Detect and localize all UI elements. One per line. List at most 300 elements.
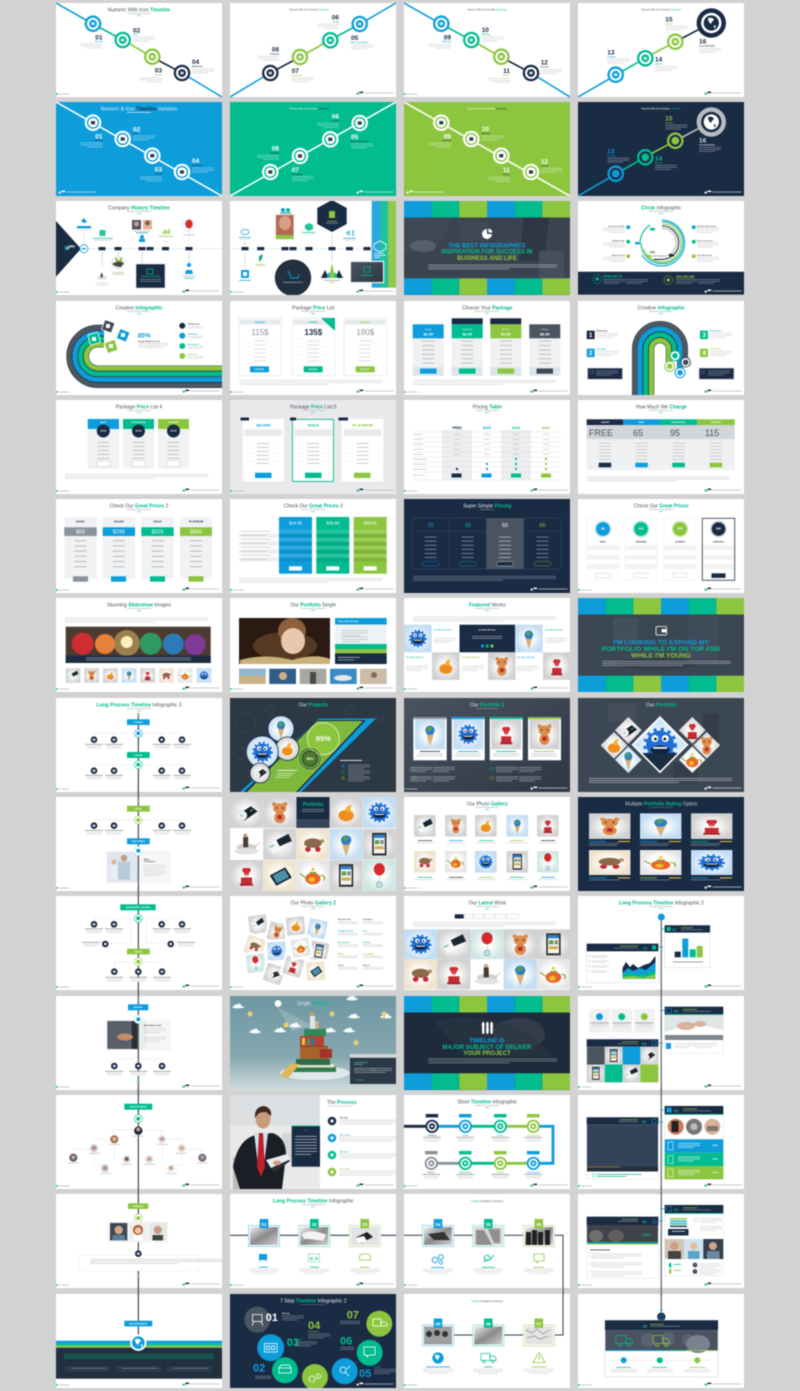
percentage rings: [300, 723, 339, 769]
step labels: Delivery: [503, 174, 510, 176]
slide: numeric timeline 01-04: [55, 2, 223, 98]
mosaic images: [230, 797, 396, 891]
step labels: [607, 116, 721, 170]
featured work grid: Your Work Title Here: [545, 628, 563, 632]
percentage block: 85%: [138, 333, 151, 340]
price card: business: REGISTER: [361, 369, 370, 371]
step numbers: 01: [266, 1312, 278, 1324]
step captions: Development: [308, 1330, 320, 1333]
process tree: DESIGN: [135, 808, 142, 810]
silver card: [240, 418, 284, 481]
pricing columns: FREE: [589, 428, 613, 438]
diagonal timeline with nodes: [404, 102, 570, 196]
headline: PORTFOLIO WHILE I'M ON TOP AND: [602, 646, 720, 653]
price card: personal: PERSONAL: [255, 321, 266, 324]
slide: long process timeline infographic: [230, 1194, 396, 1288]
numbered steps: 4: [702, 350, 706, 357]
numbered steps: [587, 330, 732, 357]
legend list: Brainstorm: [188, 353, 198, 356]
numbered steps: 3: [702, 332, 706, 339]
left list: Professional Slides: [608, 226, 625, 228]
pricing columns: $35.99: [326, 520, 340, 525]
slide: package price list 4: [55, 400, 222, 494]
title: Our Portfolio Single: [291, 603, 336, 609]
video card: [587, 1117, 658, 1179]
process tree: PLANNING: [134, 721, 144, 724]
about block with photo: [106, 847, 171, 883]
title: 7 Step Timeline Infographic 2: [280, 1299, 347, 1305]
area chart card: [587, 944, 658, 983]
title: Timeline Infographic Continued: [471, 1200, 504, 1203]
step labels: Timeline: [155, 74, 162, 76]
left list: Unlimited Style: [612, 240, 625, 242]
title: Long Process Timeline Infographic: [273, 1199, 354, 1205]
pricing grid: [412, 518, 561, 569]
small diamond images: [601, 717, 720, 773]
step labels: Multitasking: [192, 65, 202, 68]
diagonal timeline with nodes: [56, 102, 222, 196]
category lists: Mobiles: [338, 953, 345, 955]
step labels: 13: [607, 149, 615, 156]
left list: [603, 226, 630, 262]
thumbnail row: [239, 669, 387, 684]
bottom row nodes: [422, 1151, 542, 1178]
plan cards: Business: [502, 329, 510, 331]
step 07: 07: [536, 1321, 542, 1326]
plan cards: DIAMONDS: [713, 540, 725, 543]
timeline line: [422, 1294, 563, 1335]
title: Our Projects: [299, 703, 328, 709]
price card: business: [344, 318, 387, 376]
businessman photo: [230, 1095, 320, 1189]
plan columns: $65: [76, 529, 85, 535]
plan columns: $325: [152, 529, 164, 535]
slide: our photo gallery 2: [229, 896, 396, 990]
plan cards: $365: [716, 529, 722, 531]
step labels: [80, 27, 214, 82]
title: Stunning Slideshow Images: [107, 603, 171, 609]
colour bands: [404, 996, 570, 1012]
process tree: CONTENT: [134, 755, 144, 757]
step labels: 05: [351, 35, 359, 42]
timeline spine: [658, 914, 665, 990]
slide: process timeline with about block: [55, 796, 222, 892]
price cards: $25.99: [100, 430, 106, 432]
title: Our Photo Gallery: [467, 802, 508, 808]
triangle mini chart: [321, 251, 343, 283]
description panel: [335, 618, 387, 664]
title: Numeric With Icon Timeline Continued: [289, 9, 329, 12]
headline: [602, 640, 720, 659]
step labels: Basic Layout Master: [351, 140, 369, 143]
timeline items above and below: [77, 218, 196, 288]
step labels: Interview: [541, 65, 549, 68]
step 04: 04: [436, 1222, 441, 1227]
process tree: DEVELOPMENT: [131, 841, 146, 843]
three feature tiles: [589, 1009, 655, 1039]
clouds and balloons: [232, 996, 392, 1047]
plan cards: $2.99: [462, 332, 472, 336]
title: Single Project: [297, 1001, 329, 1007]
step labels: 07: [292, 68, 299, 75]
step labels: 15: [665, 116, 673, 123]
price card: business: BUSINESS: [360, 322, 371, 324]
name labels: [68, 1136, 208, 1174]
arch colour track: [634, 324, 686, 395]
price card: company: REGISTER: [309, 369, 318, 371]
notes: [410, 767, 541, 781]
numbered steps: 1: [589, 332, 593, 339]
diagonal green panel: [240, 718, 376, 792]
comparison table: [413, 426, 561, 480]
slide: numeric timeline 05-08: [229, 2, 397, 98]
delivery card: [605, 1320, 718, 1377]
step labels: Satisfied: [655, 62, 662, 65]
process tree: DELIVERY: [134, 1007, 143, 1009]
pricing columns: [279, 517, 387, 574]
step labels: 16: [699, 39, 707, 46]
price cards: BUSINESS: [169, 422, 179, 424]
thumbnail row: [66, 668, 211, 683]
step 01: [248, 1219, 280, 1274]
slide: diamond portfolio: [577, 697, 745, 793]
title: Featured Works: [469, 603, 506, 609]
pricing columns: PROFESSIONAL: [672, 421, 687, 424]
featured work grid: Your Work Title Here: [478, 628, 496, 632]
handshake card: [106, 1015, 171, 1051]
three detail nodes: [105, 1063, 171, 1076]
main photo of child reading: [239, 618, 330, 664]
price card: company: 135$: [304, 328, 323, 337]
pricing columns: 115: [705, 428, 719, 438]
step 03: 03: [362, 1222, 368, 1227]
legend list: Backup story: [188, 323, 199, 326]
step 05: [473, 1219, 504, 1274]
slide: feedback team photos: [56, 1194, 229, 1288]
slide: company history timeline: [55, 200, 222, 296]
filter tabs: [455, 914, 519, 918]
photo background shapes: [608, 703, 719, 783]
bottom row nodes: Delivery: [428, 1172, 435, 1174]
numbered steps: 2: [589, 350, 593, 357]
numbered steps: Positioning: [596, 348, 606, 350]
category lists: Brochure: [363, 942, 371, 944]
price card: company: COMPANY: [308, 321, 318, 324]
scattered photos: [241, 912, 332, 988]
about block with photo: Development: [144, 860, 156, 863]
slide: portfolio mosaic: [230, 796, 396, 892]
process tree: [85, 797, 191, 891]
step labels: [429, 27, 563, 83]
slide: package price list 5: [229, 400, 396, 494]
book tower illustration: [280, 1012, 350, 1080]
step labels: Draft: [133, 132, 138, 135]
slide: package price list: [229, 300, 396, 396]
right list: Beautiful Slide Design: [697, 225, 716, 228]
platinum card: [338, 418, 383, 481]
percentage rings: 85%: [316, 734, 331, 743]
delivery card: 09: [643, 1323, 648, 1328]
tilted icon tiles: [88, 320, 130, 354]
step labels: [607, 17, 721, 71]
slide: creative infographic arch: [578, 300, 744, 396]
step labels: 04: [192, 158, 200, 165]
step numbers: 06: [340, 1335, 352, 1347]
step labels: Marketing: [482, 132, 490, 135]
step 02: 02: [312, 1222, 317, 1227]
headline: WHILE I'M YOUNG: [631, 652, 691, 659]
top row nodes: Design: [497, 1135, 503, 1137]
step labels: 10: [482, 126, 489, 133]
slide: our portfolio 2: [403, 697, 571, 793]
coloured side strips: [372, 201, 396, 288]
plan columns: PLATINUM: [189, 520, 204, 524]
team card: 07: [674, 1207, 679, 1212]
step labels: 08: [272, 145, 279, 152]
title: Our Latest Work: [469, 901, 507, 907]
process steps: We Create: [340, 1150, 349, 1154]
plan cards: $120: [638, 529, 644, 531]
slide: our latest work: [404, 896, 570, 990]
connected step circles: [244, 1307, 392, 1390]
stats card with photo: 08: [642, 1219, 647, 1224]
step labels: Launch Worldwide: [699, 145, 715, 147]
main diamond image: [632, 716, 688, 773]
title: Our Portfolio 2: [470, 703, 505, 709]
step labels: Feedback: [607, 155, 616, 157]
section label: AUTOMATIC MANAGE: [130, 1105, 147, 1108]
step labels: 10: [482, 27, 489, 34]
step labels: Interview: [541, 164, 549, 167]
teal and blue icons: [239, 223, 356, 281]
featured work grid: Your Work Title Here: [462, 656, 480, 659]
colour bands: [578, 598, 744, 614]
comparison table: $165: [483, 426, 491, 430]
title: Package Price List 4: [116, 405, 162, 411]
sliders icon: [482, 1022, 493, 1034]
headline: BUSINESS AND LIFE: [457, 256, 517, 262]
step labels: 13: [607, 50, 615, 57]
step labels: Planning: [95, 140, 102, 142]
step labels: 12: [541, 59, 548, 66]
step labels: Purchase: [665, 122, 673, 124]
plan cards: $3.99: [501, 332, 511, 336]
slide: short timeline infographic: [404, 1095, 570, 1189]
step numbers: 02: [253, 1363, 265, 1375]
spine and label: FEEDBACK: [133, 1205, 144, 1208]
slide: choose your package: [403, 300, 570, 396]
headline: INSPIRATION FOR SUCCESS IN: [442, 250, 532, 256]
step labels: 09: [444, 133, 451, 140]
comparison table: $420: [542, 426, 550, 430]
title: Check Our Great Prices 3: [284, 504, 343, 510]
step labels: 11: [503, 167, 510, 174]
plan cards: $6.99: [540, 332, 550, 336]
process tree: TESTING: [134, 951, 143, 953]
plan columns: SILVER: [114, 520, 124, 524]
price card: company: [292, 318, 335, 376]
pricing grid: 65: [540, 523, 546, 529]
navy quote box: “”: [304, 1129, 308, 1133]
timeline track: [404, 1126, 553, 1163]
category lists: Stories: [338, 964, 344, 967]
pricing columns: STARTER: [601, 421, 610, 424]
price cards: $99.99: [171, 430, 176, 432]
headline: THE BEST INFOGRAPHICS: [448, 243, 526, 249]
diagonal timeline with nodes: [578, 8, 726, 97]
diagonal timeline with nodes: [56, 3, 222, 97]
title: Circle Infographic: [641, 206, 682, 212]
step labels: Marketing: [442, 139, 451, 142]
plan cards: $99: [601, 529, 606, 531]
step labels: Launch Worldwide: [699, 46, 715, 48]
slide: timeline infographic steps 04-06: [404, 1194, 570, 1288]
step 04: [422, 1219, 454, 1274]
pricing columns: 95: [670, 428, 680, 438]
navy stats band: 356,356,356: [676, 275, 695, 279]
category lists: Business Card: [338, 919, 351, 921]
step labels: [80, 126, 214, 181]
label: [124, 1321, 152, 1326]
mosaic images: Portfolio: [303, 802, 323, 808]
slide: the process: [230, 1095, 425, 1189]
plan cards: [587, 518, 735, 580]
step numbers: 04: [308, 1320, 321, 1332]
title: Multiple Portfolio Rating Option: [625, 802, 698, 808]
text box with node: [78, 1250, 229, 1277]
step labels: 15: [665, 17, 673, 24]
featured work grid: Your Work Title Here: [406, 656, 424, 659]
title: Numeric & Icon Timeline Variation: [101, 106, 177, 112]
step labels: [429, 126, 563, 182]
pricing columns: BUSINESS: [711, 422, 721, 424]
photo background shapes: [404, 216, 564, 278]
plan cards: Premium: [541, 329, 549, 331]
product cards: [413, 717, 561, 760]
slide: featured works: [403, 598, 570, 692]
label: WORLDWIDE MARKET: [129, 1322, 149, 1325]
step labels: Presentation: [292, 74, 303, 77]
plan cards: Starting: [425, 328, 431, 331]
right list: Easy to Customize: [697, 240, 713, 242]
plan cards: STANDARD: [635, 540, 647, 543]
headline: YOUR PROJECT: [463, 1051, 511, 1057]
left list: Brand Concept: [612, 254, 625, 257]
step labels: 02: [133, 27, 141, 34]
video card: 06: [642, 1119, 647, 1124]
bottom row nodes: Daily Posting: [460, 1171, 471, 1174]
step 05: 05: [486, 1222, 491, 1227]
media grid card: 04: [642, 1041, 647, 1046]
process tree: [82, 896, 195, 990]
timeline line: [404, 1235, 563, 1288]
slide: how much we charge: [578, 400, 744, 494]
gold card: [290, 418, 333, 481]
step labels: Packaging: [270, 153, 279, 155]
slide: blue timeline variation: [55, 101, 223, 197]
step labels: [257, 114, 373, 181]
slide: numeric timeline 13-16: [577, 2, 744, 98]
handshake card: About Delivery Time: [144, 1024, 161, 1027]
legend list: Packaging: [188, 334, 197, 336]
slide: pricing table: [403, 400, 570, 494]
featured work grid: Your Work Title Here: [434, 628, 452, 632]
silver card: SILVER: [256, 422, 270, 428]
curved colour track: [69, 328, 222, 385]
comparison table: FREE: [452, 426, 462, 430]
step labels: Satisfied: [655, 161, 662, 164]
top row nodes: Content: [462, 1134, 469, 1137]
horizontal timeline: [80, 245, 222, 253]
navy triangle with logo: glite: [68, 244, 75, 248]
feature stripes: [239, 531, 279, 562]
price cards: [88, 419, 189, 469]
percentage block: [138, 333, 168, 348]
step labels: Presentation: [292, 173, 303, 176]
legend list: Development: [188, 343, 200, 346]
slide: timeline cards 05 and 06: [578, 1095, 744, 1189]
numbered steps: Development: [710, 330, 722, 332]
navy triangle with logo: [56, 221, 81, 277]
timeline spine: [659, 996, 664, 1090]
slide: development customize tree: [55, 896, 222, 990]
plan columns: $560: [190, 529, 202, 535]
featured work grid: [404, 625, 571, 680]
slide: teal timeline variation: [229, 101, 397, 197]
slide: timeline statement: [404, 996, 570, 1090]
slide: timeline cards 03 and 04: [578, 996, 744, 1090]
step labels: Multitasking: [192, 164, 202, 167]
title: Creative Infographic: [115, 306, 163, 312]
step 03: [350, 1219, 380, 1274]
gold card: GOLD: [307, 422, 319, 428]
slide: delivery timeline card: [578, 1294, 744, 1388]
title: The Process: [327, 1100, 357, 1106]
plan columns: GOLD: [153, 520, 162, 524]
pie icon: [482, 228, 492, 239]
price cards: $55.99: [136, 430, 141, 432]
plan columns: [64, 517, 212, 582]
step 07: [524, 1318, 554, 1374]
step numbers: 07: [347, 1309, 359, 1321]
step labels: 01: [95, 34, 103, 41]
slide: 7 step timeline infographic 2: [230, 1294, 396, 1390]
timeline spine: [659, 1095, 664, 1189]
slide: best infographics statement: [403, 200, 571, 296]
step labels: Planning: [95, 41, 102, 43]
pricing columns: BASIC: [639, 421, 645, 424]
step numbers: 05: [359, 1368, 371, 1380]
step captions: Content: [295, 1338, 302, 1341]
step labels: 14: [655, 155, 663, 162]
step labels: Design: [333, 121, 339, 123]
bar chart card: 01: [672, 927, 677, 932]
top row nodes: [423, 1114, 542, 1141]
slide: timeline cards 07 and 08: [578, 1194, 744, 1288]
step labels: 11: [503, 68, 510, 75]
writing photo card: [665, 1007, 723, 1053]
doodle background: [234, 705, 384, 784]
spine and org lines: [73, 1095, 202, 1189]
headline: I'M LOOKING TO EXPAND MY: [613, 640, 709, 647]
plan cards: BASIC: [600, 540, 607, 543]
step labels: 06: [332, 114, 339, 121]
photo background shapes: [434, 1018, 554, 1056]
pricing grid: 25: [428, 523, 434, 529]
numbered steps: Creativeness: [710, 348, 721, 350]
round icons on arch: [665, 351, 690, 378]
price cards: PROFESSIONAL: [131, 421, 147, 424]
